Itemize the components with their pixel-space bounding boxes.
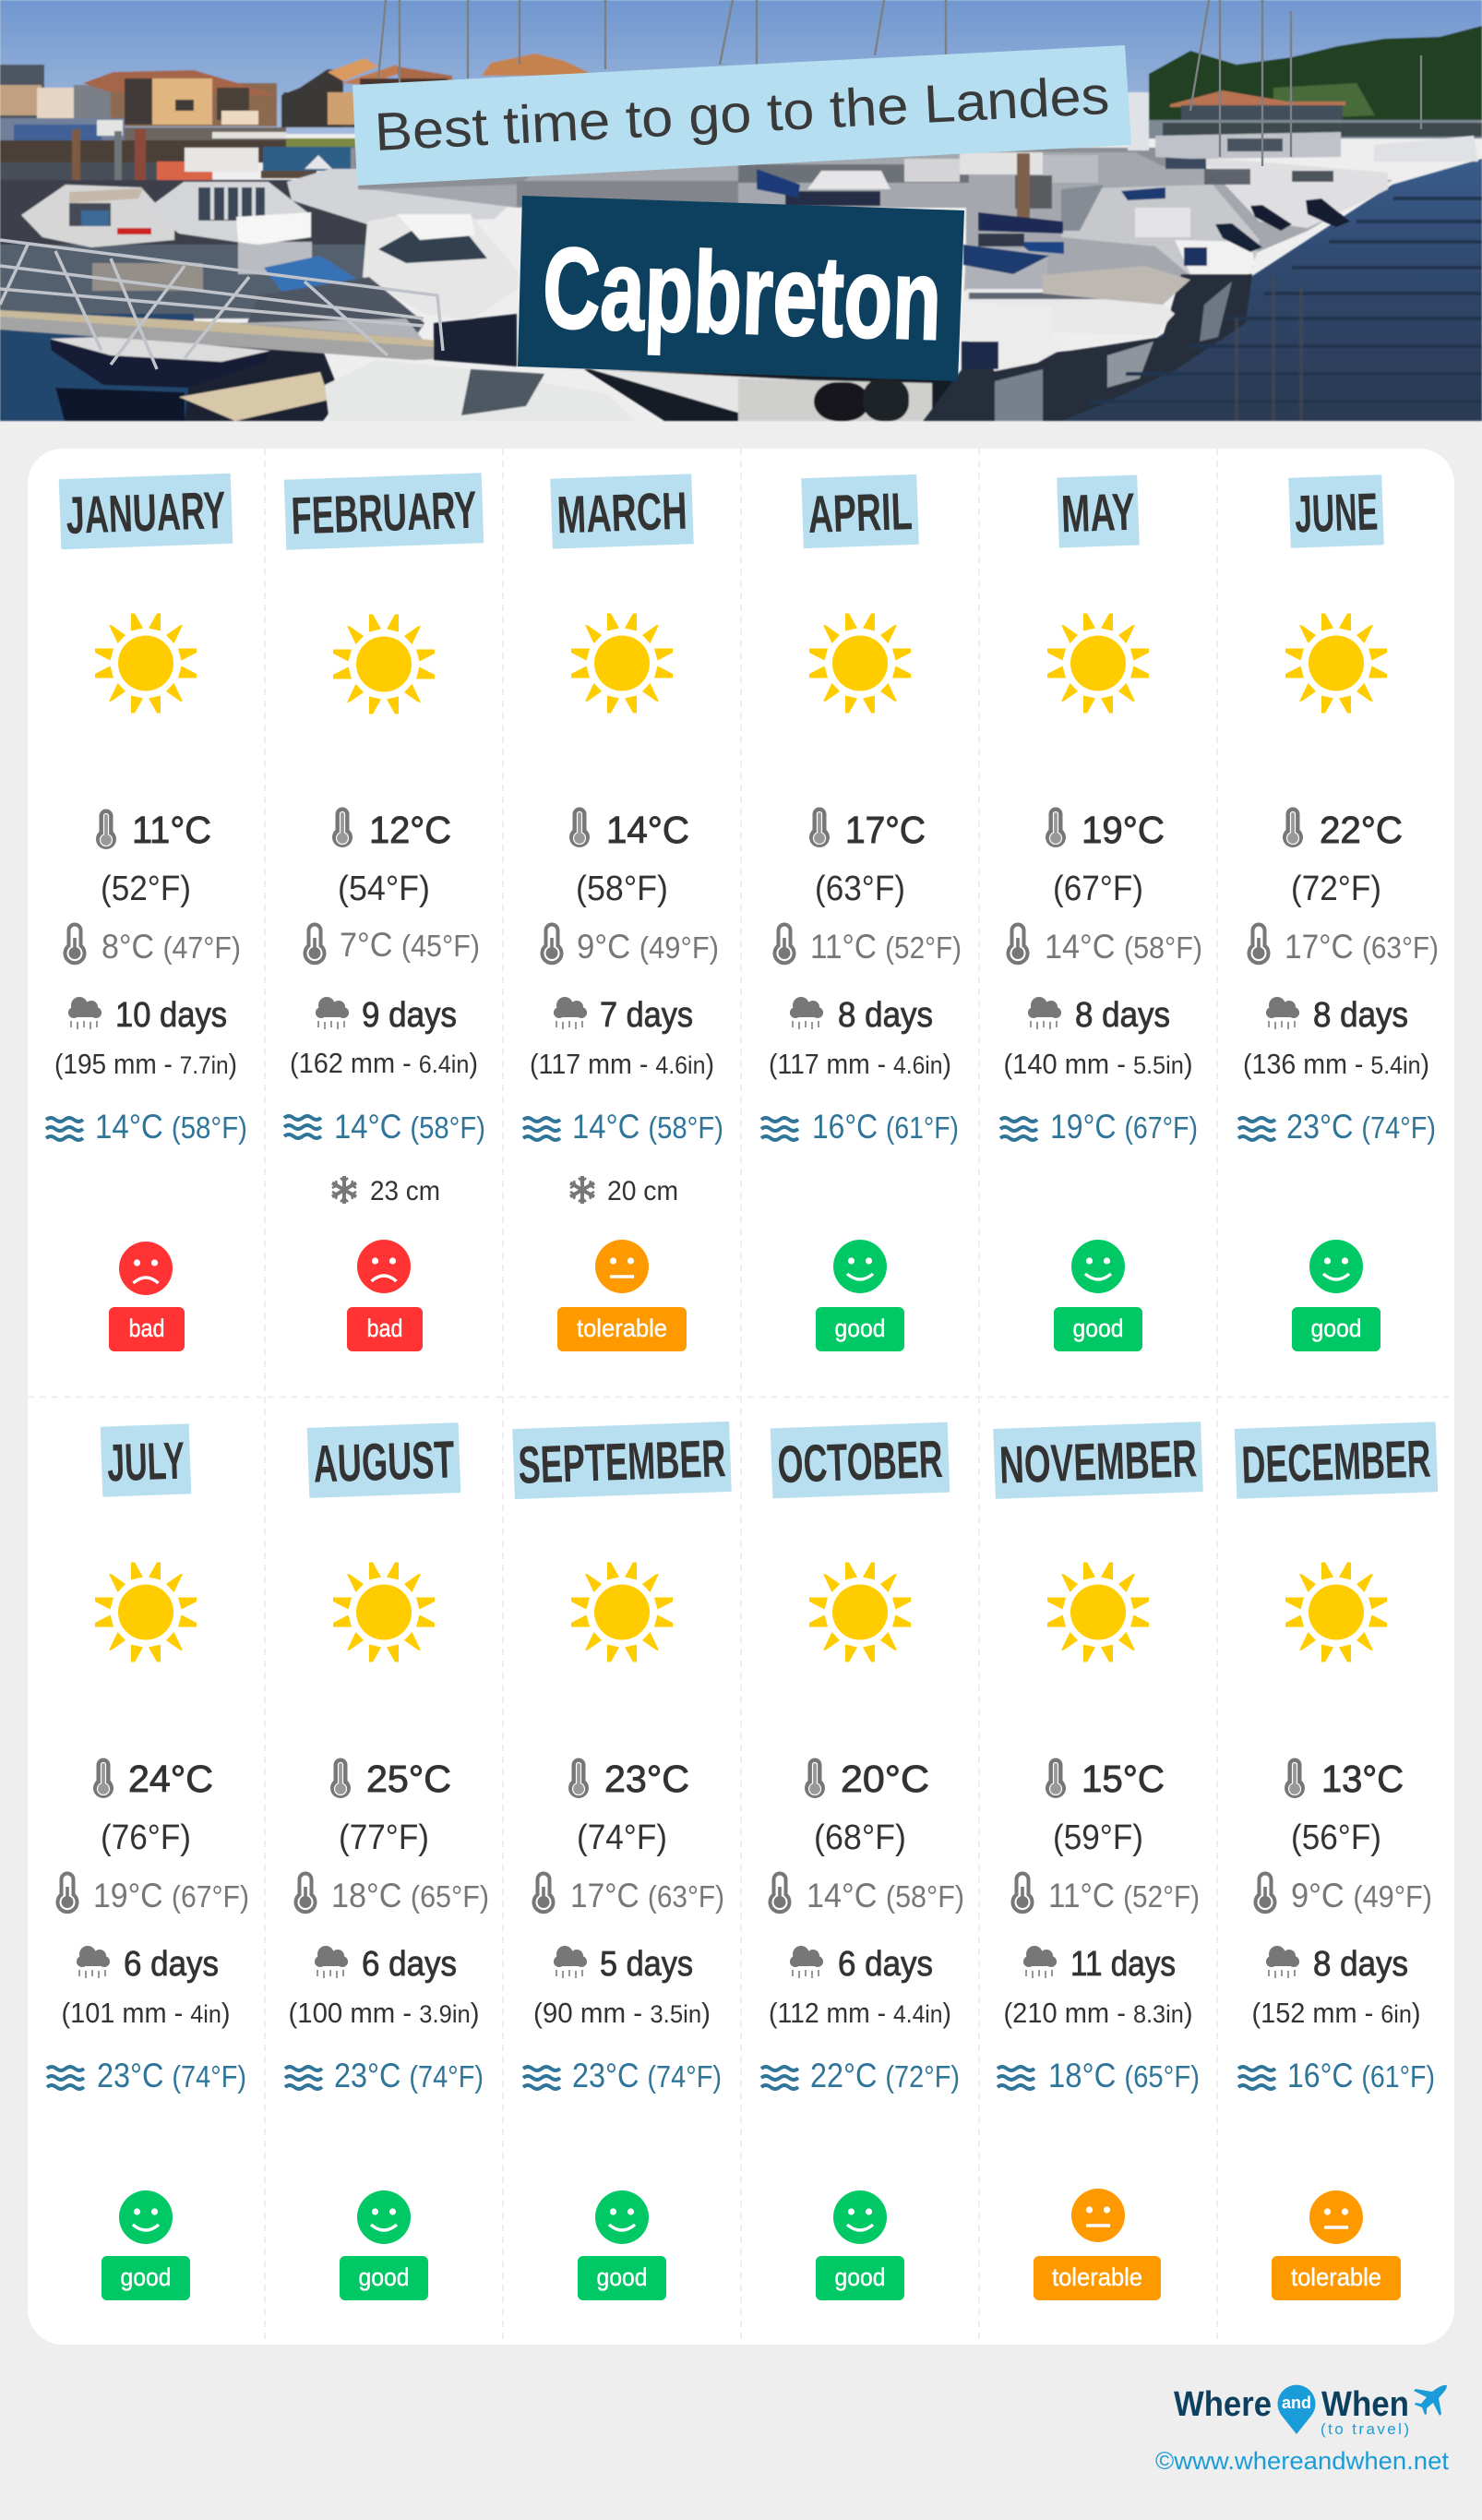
rating badge: tolerable [1272, 2256, 1401, 2300]
icon: sun [1285, 1562, 1387, 1662]
rating badge: good: good [1072, 1314, 1124, 1342]
average low temperature: 9°C (49°F) [1291, 1877, 1432, 1914]
rating badge: good: good [120, 2263, 172, 2291]
icon: low thermometer [1008, 925, 1028, 963]
icon: sun [95, 613, 197, 713]
rainy days: 9 days [362, 996, 457, 1035]
sea temperature: 18°C (65°F) [1048, 2057, 1200, 2094]
icon: rain cloud [77, 1946, 110, 1978]
precipitation: (140 mm - 5.5in) [1004, 1048, 1192, 1080]
high in Fahrenheit: (74°F) [577, 1818, 667, 1857]
sea temperature: 23°C (74°F) [1286, 1108, 1436, 1146]
rainy days: 7 days [600, 996, 693, 1035]
icon: low thermometer [1013, 1874, 1032, 1912]
title banner: Best time to go to the Landes [353, 45, 1131, 186]
sea temperature: 14°C (58°F) [334, 1108, 485, 1146]
panel: April [761, 474, 962, 1351]
high in Fahrenheit: (59°F) [1053, 1818, 1143, 1857]
high in Fahrenheit: (72°F) [1291, 870, 1381, 908]
rating badge: tolerable: tolerable [1291, 2263, 1381, 2291]
sea temperature: 23°C (74°F) [572, 2057, 722, 2094]
month heading [1288, 474, 1384, 548]
logo: Where and When [1174, 2385, 1447, 2438]
month heading: JULY [106, 1432, 185, 1493]
icon: sun [571, 1562, 673, 1662]
precipitation: (210 mm - 8.3in) [1004, 1997, 1192, 2029]
precipitation: (117 mm - 4.6in) [530, 1048, 714, 1080]
average low temperature: 14°C (58°F) [807, 1877, 964, 1914]
sea temperature: 22°C (72°F) [810, 2057, 960, 2094]
sea temperature: 23°C (74°F) [334, 2057, 484, 2094]
icon: thermometer [1283, 807, 1303, 847]
icon: rain cloud [1266, 1946, 1299, 1978]
rating badge: bad: bad [129, 1314, 164, 1342]
average high temperature: 19°C [1082, 809, 1165, 851]
high in Fahrenheit: (68°F) [814, 1818, 906, 1857]
month heading: OCTOBER [777, 1430, 944, 1494]
icon: thermometer [568, 1758, 589, 1798]
logo: Where and When: and [1282, 2394, 1311, 2412]
icon: map pin [1277, 2385, 1316, 2434]
average high temperature: 20°C [841, 1758, 929, 1800]
icon: happy face [1309, 1240, 1363, 1293]
header photo: Capbreton marina [0, 0, 1482, 421]
icon: sad face [357, 1240, 411, 1293]
snowfall: 23 cm [370, 1176, 440, 1206]
rating badge: good [1054, 1307, 1142, 1351]
rainy days: 11 days [1070, 1945, 1176, 1984]
icon: thermometer [96, 809, 116, 849]
logo: Where and When: When [1321, 2385, 1409, 2424]
icon: happy face [833, 1240, 887, 1293]
average high temperature: 13°C [1321, 1758, 1404, 1800]
panel: January [46, 474, 247, 1351]
month heading [1057, 475, 1140, 547]
icon: waves [1238, 2067, 1275, 2089]
average low temperature: 18°C (65°F) [331, 1877, 489, 1914]
rainy days: 6 days [124, 1945, 219, 1984]
icon: sun [1285, 613, 1387, 713]
panel: July [47, 1423, 249, 2300]
rating badge: bad: bad [367, 1314, 402, 1342]
sea temperature: 14°C (58°F) [95, 1108, 247, 1146]
website credit: ©www.whereandwhen.net [1155, 2447, 1449, 2475]
icon: thermometer [332, 807, 353, 847]
sea temperature: 16°C (61°F) [812, 1108, 959, 1146]
precipitation: (101 mm - 4in) [61, 1997, 230, 2029]
icon: waves [998, 2067, 1034, 2089]
icon: low thermometer [65, 925, 85, 963]
icon: neutral face [1309, 2190, 1363, 2244]
average high temperature: 25°C [366, 1758, 451, 1800]
high in Fahrenheit: (58°F) [576, 870, 668, 908]
icon: waves [46, 1118, 83, 1140]
month heading [307, 1422, 460, 1498]
average low temperature: 19°C (67°F) [93, 1877, 249, 1914]
rainy days: 5 days [600, 1945, 693, 1984]
rating badge: good: good [596, 2263, 648, 2291]
average low temperature: 14°C (58°F) [1045, 928, 1202, 966]
average low temperature: 9°C (49°F) [577, 928, 719, 966]
icon: snowflake [570, 1176, 594, 1204]
panel: October [761, 1422, 964, 2300]
icon: sad face [119, 1242, 173, 1295]
city banner: Capbreton: Capbreton [541, 224, 943, 365]
rating badge: good: good [1310, 1314, 1362, 1342]
sea temperature: 14°C (58°F) [572, 1108, 723, 1146]
high in Fahrenheit: (77°F) [339, 1818, 429, 1857]
precipitation: (136 mm - 5.4in) [1243, 1048, 1429, 1080]
high in Fahrenheit: (76°F) [101, 1818, 191, 1857]
icon: waves [1000, 1118, 1037, 1140]
rating badge: good [578, 2256, 666, 2300]
icon: sun [333, 1562, 435, 1662]
precipitation: (100 mm - 3.9in) [288, 1997, 480, 2029]
icon: waves [285, 2067, 322, 2089]
icon: waves [523, 1118, 560, 1140]
icon: waves [1238, 1118, 1275, 1140]
sea temperature: 16°C (61°F) [1287, 2057, 1435, 2094]
icon: low thermometer [1249, 925, 1268, 963]
precipitation: (112 mm - 4.4in) [769, 1997, 951, 2029]
icon: thermometer [569, 807, 590, 847]
sea temperature: 19°C (67°F) [1050, 1108, 1198, 1146]
panel: August [285, 1422, 489, 2300]
month heading: SEPTEMBER [518, 1429, 727, 1495]
rainy days: 8 days [1313, 1945, 1408, 1984]
month heading: MARCH [556, 482, 688, 545]
icon: low thermometer [775, 925, 794, 963]
month heading: MAY [1060, 483, 1136, 544]
panel: February [284, 473, 485, 1351]
average high temperature: 17°C [845, 809, 926, 851]
snowfall: 20 cm [607, 1176, 678, 1206]
icon: neutral face [595, 1240, 649, 1293]
icon: low thermometer [305, 925, 325, 963]
city banner: Capbreton [518, 196, 964, 381]
precipitation: (117 mm - 4.6in) [769, 1048, 951, 1080]
rating badge: tolerable [1034, 2256, 1161, 2300]
sea temperature: 23°C (74°F) [97, 2057, 246, 2094]
icon: waves [284, 1116, 321, 1138]
rating badge: tolerable: tolerable [577, 1314, 667, 1342]
rating badge: tolerable: tolerable [1052, 2263, 1142, 2291]
precipitation: (152 mm - 6in) [1251, 1997, 1421, 2029]
month heading [512, 1422, 732, 1499]
icon: rain cloud [790, 997, 823, 1029]
average high temperature: 22°C [1320, 809, 1403, 851]
icon: low thermometer [543, 925, 561, 963]
month heading [771, 1422, 950, 1498]
rainy days: 8 days [1313, 996, 1408, 1035]
icon: happy face [1071, 1240, 1125, 1293]
average low temperature: 11°C (52°F) [810, 928, 962, 966]
month heading [993, 1422, 1203, 1499]
icon: rain cloud [316, 997, 349, 1029]
icon: low thermometer [57, 1874, 78, 1912]
rainy days: 10 days [115, 996, 227, 1035]
icon: waves [523, 2067, 560, 2089]
icon: thermometer [93, 1758, 114, 1798]
month heading [801, 474, 919, 548]
icon: happy face [119, 2190, 173, 2244]
precipitation: (162 mm - 6.4in) [290, 1047, 478, 1079]
title banner: Best time to go to the Landes: Best time to go to the Landes [373, 66, 1111, 162]
average high temperature: 24°C [128, 1758, 213, 1800]
average high temperature: 11°C [132, 809, 211, 851]
icon: sun [95, 1562, 197, 1662]
icon: rain cloud [68, 997, 102, 1029]
icon: rain cloud [315, 1946, 348, 1978]
high in Fahrenheit: (67°F) [1053, 870, 1143, 908]
icon: sun [1047, 1562, 1149, 1662]
high in Fahrenheit: (56°F) [1291, 1818, 1381, 1857]
rating badge: bad [109, 1307, 185, 1351]
average high temperature: 12°C [369, 809, 451, 851]
icon: neutral face [1071, 2189, 1125, 2242]
icon: thermometer [1046, 1758, 1066, 1798]
icon: waves [761, 2067, 798, 2089]
average low temperature: 11°C (52°F) [1048, 1877, 1200, 1914]
logo: Where and When: Where [1174, 2385, 1272, 2424]
icon: happy face [595, 2190, 649, 2244]
rating badge: tolerable [557, 1307, 687, 1351]
rainy days: 6 days [838, 1945, 933, 1984]
month heading [284, 473, 484, 550]
icon: rain cloud [1023, 1946, 1057, 1978]
rating badge: good [1292, 1307, 1380, 1351]
icon: low thermometer [533, 1874, 554, 1912]
precipitation: (195 mm - 7.7in) [54, 1048, 237, 1080]
average high temperature: 14°C [606, 809, 689, 851]
icon: happy face [357, 2190, 411, 2244]
icon: rain cloud [790, 1946, 823, 1978]
icon: sun [333, 615, 435, 714]
rating badge: bad [347, 1307, 423, 1351]
icon: waves [761, 1118, 798, 1140]
average low temperature: 8°C (47°F) [102, 928, 241, 966]
month heading: AUGUST [312, 1430, 456, 1494]
average low temperature: 17°C (63°F) [1285, 928, 1439, 966]
icon: waves [47, 2067, 84, 2089]
precipitation: (90 mm - 3.5in) [533, 1997, 711, 2029]
month heading: JUNE [1294, 482, 1379, 545]
month heading: FEBRUARY [291, 481, 478, 546]
icon: plane [1414, 2385, 1447, 2416]
high in Fahrenheit: (52°F) [101, 870, 191, 908]
icon: happy face [833, 2190, 887, 2244]
icon: thermometer [330, 1758, 351, 1798]
rainy days: 8 days [838, 996, 933, 1035]
icon: low thermometer [295, 1874, 316, 1912]
icon: thermometer [1285, 1758, 1305, 1798]
rainy days: 6 days [362, 1945, 457, 1984]
average low temperature: 7°C (45°F) [340, 926, 480, 964]
rating badge: good: good [834, 1314, 886, 1342]
high in Fahrenheit: (54°F) [338, 870, 430, 908]
average high temperature: 15°C [1082, 1758, 1165, 1800]
panel: March [523, 474, 723, 1351]
month heading: APRIL [807, 482, 914, 545]
icon: rain cloud [1028, 997, 1061, 1029]
month heading: NOVEMBER [998, 1429, 1198, 1495]
icon: rain cloud [554, 1946, 587, 1978]
rating badge: good: good [358, 2263, 410, 2291]
rainy days: 8 days [1075, 996, 1170, 1035]
icon: rain cloud [554, 997, 587, 1029]
panel: May [1000, 475, 1202, 1351]
rating badge: good: good [834, 2263, 886, 2291]
average high temperature: 23°C [604, 1758, 689, 1800]
panel: December [1235, 1422, 1438, 2300]
rating badge: good [102, 2256, 190, 2300]
icon: rain cloud [1266, 997, 1299, 1029]
month heading [59, 474, 233, 549]
average low temperature: 17°C (63°F) [570, 1877, 724, 1914]
logo: Where and When: (to travel) [1321, 2420, 1409, 2438]
calendar card [28, 449, 1454, 2345]
rating badge: good [816, 2256, 904, 2300]
icon: low thermometer [1255, 1874, 1275, 1912]
icon: thermometer [805, 1758, 825, 1798]
icon: sun [1047, 613, 1149, 713]
icon: sun [809, 613, 911, 713]
icon: thermometer [1046, 807, 1066, 847]
panel: September [512, 1422, 732, 2300]
icon: snowflake [332, 1176, 356, 1204]
rating badge: good [816, 1307, 904, 1351]
month heading [550, 474, 694, 549]
icon: low thermometer [770, 1874, 790, 1912]
month heading [101, 1423, 191, 1497]
icon: thermometer [809, 807, 830, 847]
month heading: JANUARY [66, 481, 227, 546]
icon: sun [809, 1562, 911, 1662]
panel: November [993, 1422, 1203, 2300]
panel: June [1238, 474, 1439, 1351]
rating badge: good [340, 2256, 428, 2300]
high in Fahrenheit: (63°F) [815, 870, 905, 908]
icon: sun [571, 613, 673, 713]
